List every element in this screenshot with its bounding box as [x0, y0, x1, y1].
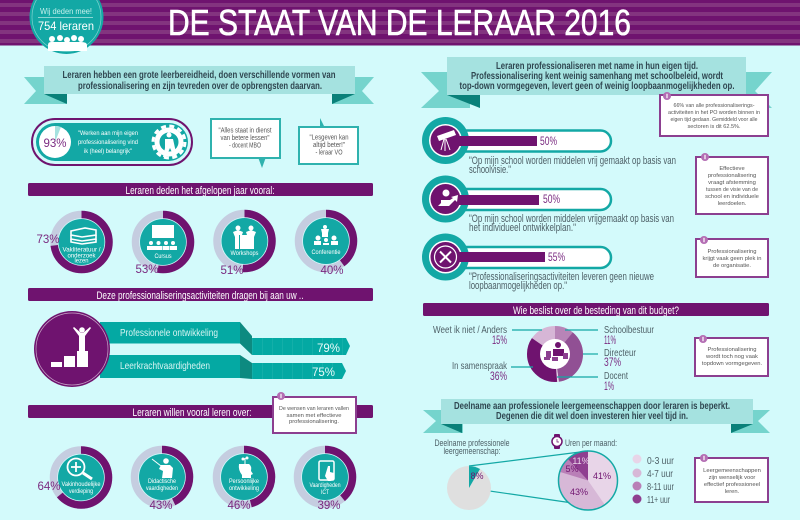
info box: geen plek: Professionalisering [708, 249, 756, 255]
heading: budget [423, 303, 769, 317]
donut: didactische vaardigheden 43%: vaardigheden [146, 485, 178, 492]
ribbon bar: leerkrachtvaardigheden 75% [100, 355, 346, 379]
info box: leergemeenschappen: Leergemeenschappen [703, 468, 761, 474]
info box: leergemeenschappen: leren. [725, 489, 740, 495]
donut: workshops 51%: 51% [220, 265, 244, 277]
donut: vakinhoudelijke verdieping 64%: Vakinhoudelijke [62, 481, 101, 488]
icon: magnifier [68, 458, 92, 479]
donut: persoonlijke ontwikkeling 46%: ontwikkeling [229, 485, 259, 492]
icon: classroom [147, 225, 177, 250]
info box: afstemming [696, 153, 768, 214]
info box: topdown: Professionalisering [708, 347, 756, 353]
meter: ontwikkelplan 50%: 50% [543, 194, 560, 206]
label: docent: Docent [604, 370, 628, 382]
legend: 0-3 uur [647, 455, 674, 467]
donut chart: budget [534, 333, 576, 375]
info box: leergemeenschappen: zijn wenselijk voor [709, 475, 755, 481]
info box: wensen: De wensen van leraren vallen [279, 406, 349, 412]
ribbon: left intro: Leraren hebben een grote leerbereidheid, doen verschillende vormen van [62, 69, 336, 81]
donut: vakliteratuur 73%: onderzoek [68, 252, 96, 260]
quote: docent MBO: "Alles staat in dienst [218, 128, 272, 134]
info box: eigen tijd: eigen tijd gedaan. Gemiddeld voor alle [670, 117, 758, 123]
donut: vakliteratuur 73%: 73% [36, 234, 60, 246]
ribbon bar: leerkrachtvaardigheden 75%: Leerkrachtvaardigheden [120, 360, 210, 372]
donut: conferentie 40%: 40% [320, 265, 344, 277]
info box: eigen tijd [660, 92, 768, 136]
icon: head with plant [239, 456, 253, 478]
info box: afstemming: Effectieve [719, 166, 745, 172]
meter: ontwikkelplan 50% [422, 176, 674, 234]
badge: participants: Wij deden mee! [40, 6, 92, 16]
donut: vakinhoudelijke verdieping 64%: verdieping [69, 488, 93, 495]
ribbon: right intro [421, 57, 772, 108]
label: schoolbestuur: 11% [604, 335, 616, 347]
info box: afstemming: vraagt afstemming [708, 180, 756, 186]
title: DE STAAT VAN DE LERAAR 2016 [168, 2, 631, 43]
donut: conferentie 40%: Conferentie [312, 249, 341, 256]
badge: participants [30, 0, 104, 54]
meter: schoolvisie 50%: schoolvisie." [469, 164, 511, 176]
donut: didactische vaardigheden 43%: Didactische [148, 478, 176, 485]
label: weet ik niet: 15% [492, 335, 507, 347]
pie chart: deelname 8%: 8% [470, 471, 484, 481]
heading: afgelopen jaar [28, 183, 373, 197]
icon: person with rising arrow [438, 190, 458, 206]
ribbon bar: professionele ontwikkeling 79% [100, 322, 350, 355]
meter: schoolvisie 50% [422, 117, 676, 176]
icon: speaker and audience [314, 225, 338, 245]
icon: group of people [48, 35, 87, 51]
callout: 93% [32, 119, 192, 165]
info box: afstemming: tussen de visie van de [706, 187, 758, 193]
label: docent: 1% [604, 381, 614, 393]
info box: afstemming: school en individuele [705, 194, 759, 200]
heading: budget: Wie beslist over de besteding van dit budget? [513, 305, 679, 317]
badge: participants: 754 leraren [38, 19, 94, 33]
donut: persoonlijke ontwikkeling 46%: Persoonlijke [229, 478, 259, 485]
label: in samenspraak: 36% [490, 371, 507, 383]
quote: docent MBO: - docent MBO [229, 142, 261, 150]
icon: person behind desk with piles of money [544, 342, 568, 361]
label: directeur: Directeur [604, 347, 636, 359]
donut: didactische vaardigheden 43% [134, 450, 190, 512]
donut: vaardigheden ICT 39%: Vaardigheden [310, 482, 341, 489]
donut: workshops 51%: Workshops [230, 250, 259, 257]
donut: cursus 53%: Cursus [154, 253, 172, 260]
callout: 93%: 93% [43, 138, 67, 150]
legend: 4-7 uur [647, 468, 673, 480]
meter: loopbaan 55%: loopbaanmogelijkheden op." [469, 280, 567, 292]
callout: 93%: "Werken aan mijn eigen [78, 130, 138, 137]
label: deelname: leergemeenschap: [444, 446, 500, 456]
label: directeur [583, 347, 636, 369]
quote: docent MBO: van betere lessen" [220, 135, 270, 142]
info box: afstemming: leerdoelen. [718, 201, 747, 207]
donut: cursus 53%: 53% [135, 264, 159, 276]
info box: wensen [273, 392, 356, 433]
donut: vakliteratuur 73%: lezen [74, 258, 89, 264]
label: weet ik niet: Weet ik niet / Anders [433, 324, 507, 336]
label: in samenspraak [452, 360, 533, 383]
heading: draagt bij [28, 288, 373, 302]
icon: telescope [437, 130, 456, 151]
pie chart: uren per maand [558, 451, 618, 510]
meter: schoolvisie 50%: "Op mijn school worden middelen vrij gemaakt op basis van [469, 155, 676, 167]
label: directeur: 37% [604, 357, 621, 369]
donut: conferentie 40% [298, 214, 354, 277]
legend: 8-11 uur [647, 481, 674, 493]
info box: eigen tijd: 66% van alle professionaliserings- [674, 103, 755, 109]
meter: ontwikkelplan 50%: "Op mijn school worden middelen vrijgemaakt op basis van [469, 213, 674, 225]
callout: 93%: professionalisering vind [78, 139, 138, 146]
ribbon: left intro: professionalisering en zijn tevreden over de opbrengsten daarvan. [78, 80, 322, 92]
pie chart: deelname 8% [447, 451, 600, 510]
info box: leergemeenschappen: effectief professioneel [704, 482, 760, 488]
label: docent [557, 370, 628, 393]
callout: 93%: ik (heel) belangrijk" [84, 148, 133, 155]
donut: vakinhoudelijke verdieping 64%: 64% [37, 481, 61, 493]
donut: cursus 53% [135, 214, 190, 276]
legend [632, 454, 674, 506]
info box: topdown [695, 335, 768, 376]
icon: books [71, 228, 96, 244]
donut: didactische vaardigheden 43%: 43% [149, 500, 173, 512]
donut: persoonlijke ontwikkeling 46% [216, 450, 272, 512]
ribbon: left intro [24, 66, 374, 104]
header band [0, 0, 800, 46]
pie chart: uren per maand: 5% [565, 464, 579, 474]
label: schoolbestuur [565, 324, 654, 347]
icon: two people at table [233, 226, 256, 249]
info box: wensen: samen met effectieve [286, 413, 342, 419]
icon: gear with person [153, 126, 185, 158]
info box: afstemming: professionalisering [708, 173, 756, 179]
heading: afgelopen jaar: Leraren deden het afgelopen jaar vooral: [126, 185, 274, 197]
info box: topdown: topdown vormgegeven. [702, 361, 763, 367]
ribbon: right intro: Leraren professionaliseren met name in hun eigen tijd. [496, 60, 698, 72]
info box: geen plek [696, 236, 768, 277]
quote: docent MBO [211, 119, 280, 168]
legend: 11+ uur [647, 494, 670, 506]
heading: willen leren over: Leraren willen vooral leren over: [132, 407, 252, 419]
label: deelname: Deelname professionele [434, 438, 510, 448]
icon: cross in circle [434, 246, 456, 268]
label: in samenspraak: In samenspraak [452, 360, 508, 372]
quote: leraar VO: "Lesgeven kan [310, 134, 349, 142]
pie chart: uren per maand: 41% [593, 471, 611, 481]
donut: vaardigheden ICT 39%: 39% [317, 500, 341, 512]
label: deelname [434, 438, 510, 456]
heading: willen leren over [28, 405, 373, 419]
icon: person on podium [34, 311, 110, 387]
meter: ontwikkelplan 50%: het individueel ontwikkelplan." [469, 222, 576, 234]
heading: draagt bij: Deze professionaliseringsactiviteiten dragen bij aan uw .. [96, 290, 304, 302]
pie chart: uren per maand: 11% [572, 456, 590, 466]
ribbon: leergemeenschappen: Degenen die dit wel doen investeren hier veel tijd in. [496, 410, 688, 422]
ribbon: leergemeenschappen [423, 399, 770, 433]
donut: persoonlijke ontwikkeling 46%: 46% [227, 500, 251, 512]
donut: vakinhoudelijke verdieping 64% [37, 450, 108, 505]
icon: tablet with hand [319, 461, 334, 481]
meter: schoolvisie 50%: 50% [540, 136, 557, 148]
label: schoolbestuur: Schoolbestuur [604, 324, 654, 336]
quote: leraar VO [299, 118, 358, 164]
meter: loopbaan 55%: 55% [548, 252, 565, 264]
quote: leraar VO: altijd beter!" [313, 142, 345, 149]
pie chart: uren per maand: 43% [570, 487, 588, 497]
ribbon bar: professionele ontwikkeling 79%: Professionele ontwikkeling [120, 327, 218, 339]
label: uren per maand: Uren per maand: [565, 438, 617, 448]
quote: leraar VO: - leraar VO [316, 150, 343, 156]
label: weet ik niet [433, 324, 542, 347]
info box: geen plek: de organisatie. [713, 263, 751, 269]
info box: wensen: professionalisering. [289, 419, 339, 425]
info box: eigen tijd: activiteiten in het PO worden binnen in [668, 110, 760, 116]
info box: eigen tijd: sectoren is dit 62.5%. [688, 124, 741, 130]
meter: loopbaan 55% [422, 234, 654, 292]
donut: vakliteratuur 73% [36, 214, 109, 270]
info box: topdown: wordt toch nog vaak [705, 354, 758, 360]
meter: loopbaan 55%: "Professionaliseringsactiviteiten leveren geen nieuwe [469, 271, 654, 283]
donut: vaardigheden ICT 39% [298, 450, 352, 512]
icon: watch [552, 434, 562, 449]
donut: vakliteratuur 73%: Vakliteratuur / [62, 246, 101, 254]
icon: teacher with pointer [152, 458, 173, 478]
donut: workshops 51% [217, 214, 272, 277]
ribbon bar: leerkrachtvaardigheden 75%: 75% [312, 367, 335, 379]
donut: vaardigheden ICT 39%: ICT [321, 489, 329, 496]
info box: geen plek: krijgt vaak geen plek in [703, 256, 761, 262]
ribbon bar: professionele ontwikkeling 79%: 79% [317, 343, 340, 355]
info box: leergemeenschappen [695, 454, 768, 502]
